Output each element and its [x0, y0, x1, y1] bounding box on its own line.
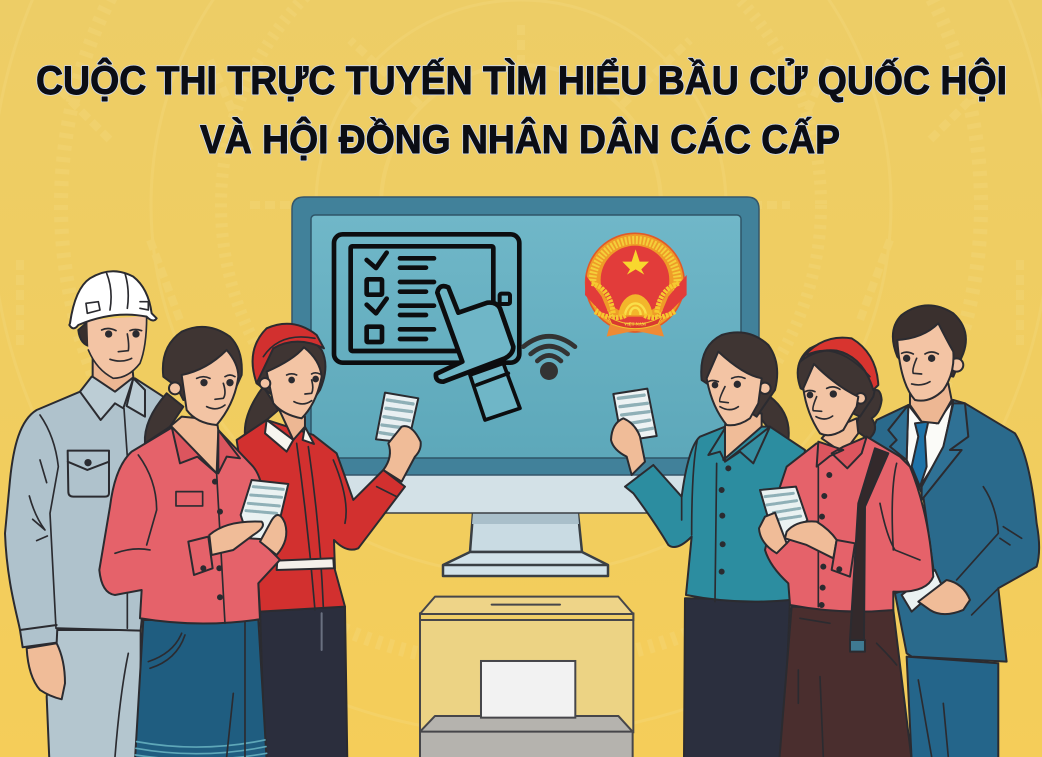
- pink woman head right: [798, 342, 876, 417]
- emblem red field: [601, 246, 669, 314]
- voting tablet icon: [334, 234, 520, 420]
- right pink ballot: [760, 487, 807, 543]
- emblem cogwheel: [618, 294, 653, 315]
- teal woman ballot: [613, 389, 657, 440]
- box body: [420, 613, 633, 732]
- monitor stand: [443, 513, 608, 576]
- computer monitor: [292, 197, 759, 576]
- red woman headband: [253, 324, 324, 383]
- woman in teal: [611, 332, 805, 757]
- red blouse right: [765, 437, 933, 612]
- teal woman head: [701, 332, 777, 417]
- pink blouse: [99, 427, 280, 624]
- bag strap: [850, 448, 888, 640]
- title: [36, 56, 1007, 162]
- sleeve cuff: [470, 363, 520, 420]
- worker collar: [80, 377, 133, 420]
- monitor frame: [292, 197, 759, 475]
- emblem ribbon: [607, 318, 664, 337]
- woman in red: [237, 324, 421, 757]
- teal woman hand: [611, 418, 645, 475]
- wifi icon: [523, 336, 575, 380]
- red woman collar: [265, 420, 293, 452]
- people left group: [5, 271, 421, 757]
- man lapels: [888, 403, 968, 500]
- right pink hands: [759, 513, 787, 553]
- pink woman ballot: [241, 480, 288, 540]
- red woman head: [254, 332, 325, 417]
- title: VÀ HỘI ĐỒNG NHÂN DÂN CÁC CẤP: [200, 116, 840, 162]
- red headband right: [800, 338, 878, 390]
- man ballot and hand: [902, 570, 942, 612]
- monitor chin: [340, 474, 705, 513]
- worker helmet: [69, 271, 157, 328]
- woman in pink right: [759, 338, 933, 757]
- teal collar: [708, 427, 770, 463]
- emblem ring: [586, 233, 684, 332]
- emblem rice ears: [592, 283, 679, 318]
- pink collar right: [817, 437, 867, 468]
- man shirt and tie: [907, 400, 953, 487]
- ballot box: [420, 597, 633, 757]
- monitor screen: [311, 215, 741, 458]
- red woman hand: [383, 426, 421, 482]
- woman in pink left: [99, 327, 288, 757]
- worker hand: [27, 643, 65, 699]
- man in suit: [868, 305, 1039, 757]
- title: VÀ HỘI ĐỒNG NHÂN DÂN CÁC CẤP: [200, 116, 840, 162]
- man head: [910, 383, 952, 423]
- worker head: [93, 350, 133, 392]
- national emblem: [585, 233, 687, 337]
- national emblem: VIỆT NAM: [624, 322, 646, 327]
- pink woman head: [163, 327, 242, 400]
- pointing hand: [436, 286, 513, 382]
- people right group: [611, 305, 1039, 757]
- pink collar: [172, 427, 240, 473]
- worker pocket: [68, 451, 109, 497]
- worker with helmet: [5, 271, 163, 757]
- paper ballot: [481, 661, 575, 718]
- emblem banner: [608, 317, 662, 329]
- pink woman hands: [260, 515, 286, 555]
- emblem star: [622, 249, 649, 275]
- checklist: [367, 253, 434, 342]
- grey slot: [420, 716, 633, 757]
- box lid: [420, 597, 633, 614]
- red woman belt: [277, 558, 334, 570]
- red woman ballot: [376, 393, 418, 443]
